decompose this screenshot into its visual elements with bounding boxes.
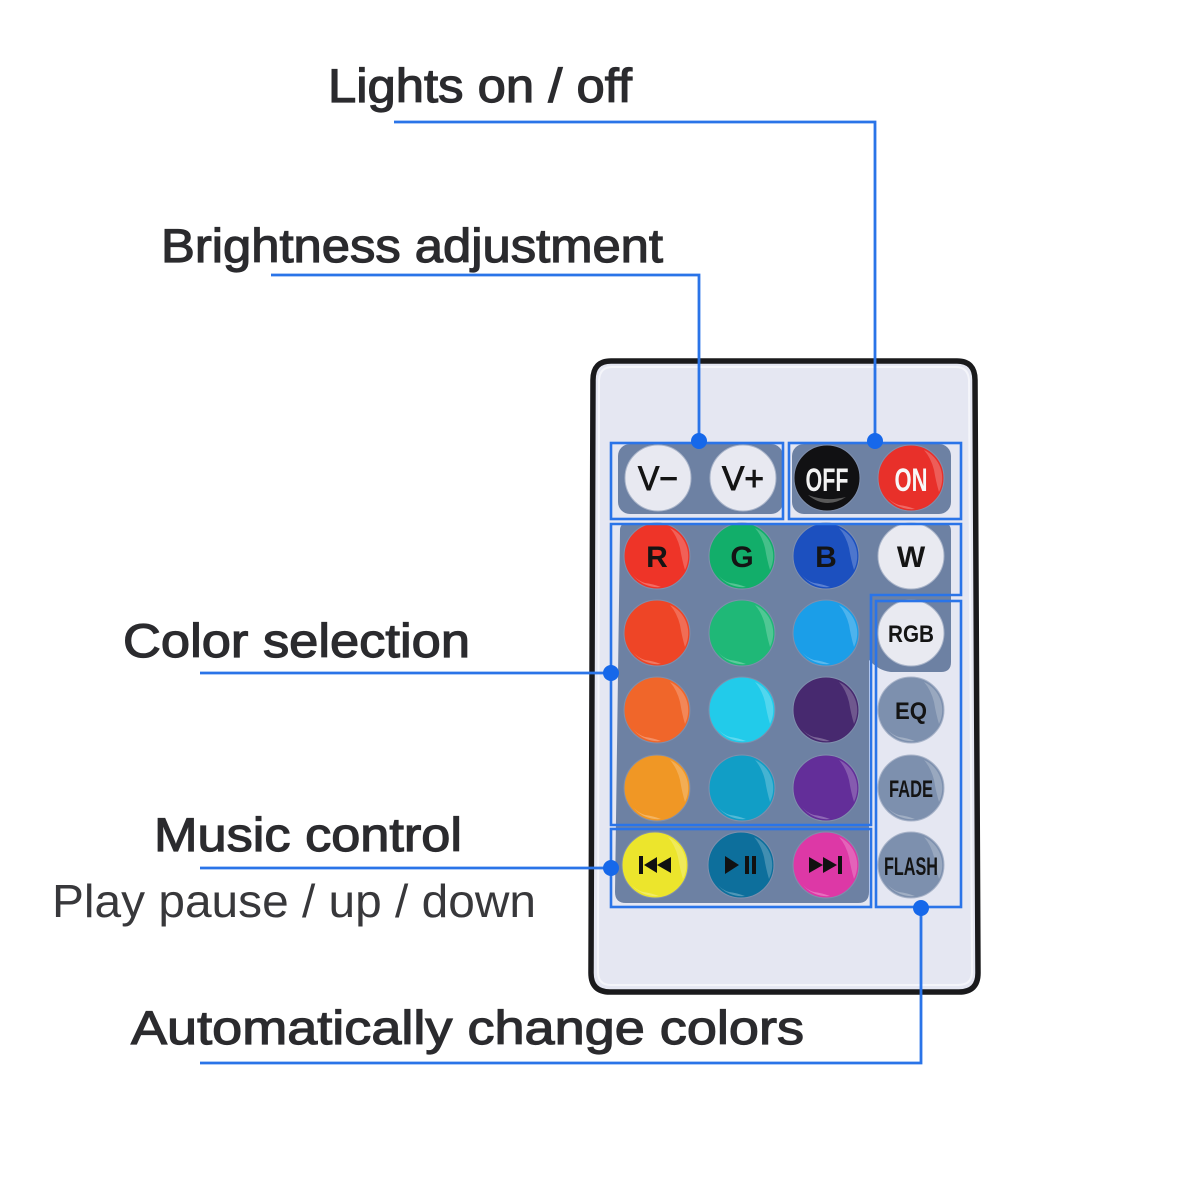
label: lights on / off: Lights on / off xyxy=(328,59,633,112)
leader line: color selection xyxy=(200,665,619,681)
label: automatically change colors: Automatically change colors xyxy=(131,1001,804,1054)
label: brightness adjustment: Brightness adjustment xyxy=(161,219,663,272)
button: sky blue xyxy=(793,600,859,666)
button: B: B xyxy=(815,541,837,574)
button: FADE: FADE xyxy=(889,776,933,803)
button: green xyxy=(709,600,775,666)
button: FADE xyxy=(878,755,944,821)
button: cyan xyxy=(709,677,775,743)
button: V- xyxy=(625,445,691,511)
button: OFF xyxy=(794,445,860,511)
button: FLASH xyxy=(878,832,944,898)
button: play pause xyxy=(708,832,774,898)
button: W xyxy=(878,523,944,589)
button: RGB: RGB xyxy=(888,621,934,648)
button: B xyxy=(793,523,859,589)
button: amber xyxy=(624,755,690,821)
button: G: G xyxy=(730,541,754,574)
leader line: lights on off xyxy=(394,122,883,449)
text: play pause up down: Play pause / up / down xyxy=(52,875,536,927)
button: red orange xyxy=(624,600,690,666)
button panel: volume xyxy=(618,444,783,514)
remote control body xyxy=(591,361,978,992)
label: color selection: Color selection xyxy=(123,614,470,667)
button panel: power xyxy=(792,444,951,514)
button: OFF: OFF xyxy=(806,462,848,498)
highlight box: color selection xyxy=(611,524,961,825)
button: teal xyxy=(709,755,775,821)
button: EQ xyxy=(878,677,944,743)
button: V+: V+ xyxy=(722,460,764,498)
highlight box: brightness xyxy=(611,443,783,519)
button panel: main colors and music xyxy=(615,523,951,903)
button: G xyxy=(709,523,775,589)
highlight box: automatic modes xyxy=(876,601,961,907)
leader line: automatically change colors xyxy=(200,900,929,1063)
button: previous xyxy=(622,832,688,898)
button: R: R xyxy=(646,541,668,574)
button: purple xyxy=(793,755,859,821)
button: R xyxy=(624,523,690,589)
button: next xyxy=(793,832,859,898)
button: EQ: EQ xyxy=(895,698,927,725)
button: V-: V− xyxy=(638,460,678,498)
button: V+ xyxy=(710,445,776,511)
button: FLASH: FLASH xyxy=(884,853,938,881)
highlight box: music control xyxy=(611,829,871,907)
label: music control: Music control xyxy=(154,808,462,861)
button: W: W xyxy=(897,541,926,574)
button: ON xyxy=(878,445,944,511)
leader line: music control xyxy=(200,860,619,876)
button: ON: ON xyxy=(894,462,928,498)
highlight box: lights on off xyxy=(789,443,961,519)
button: orange xyxy=(624,677,690,743)
button: dark purple xyxy=(793,677,859,743)
leader line: brightness xyxy=(271,275,707,449)
button: RGB xyxy=(878,600,944,666)
